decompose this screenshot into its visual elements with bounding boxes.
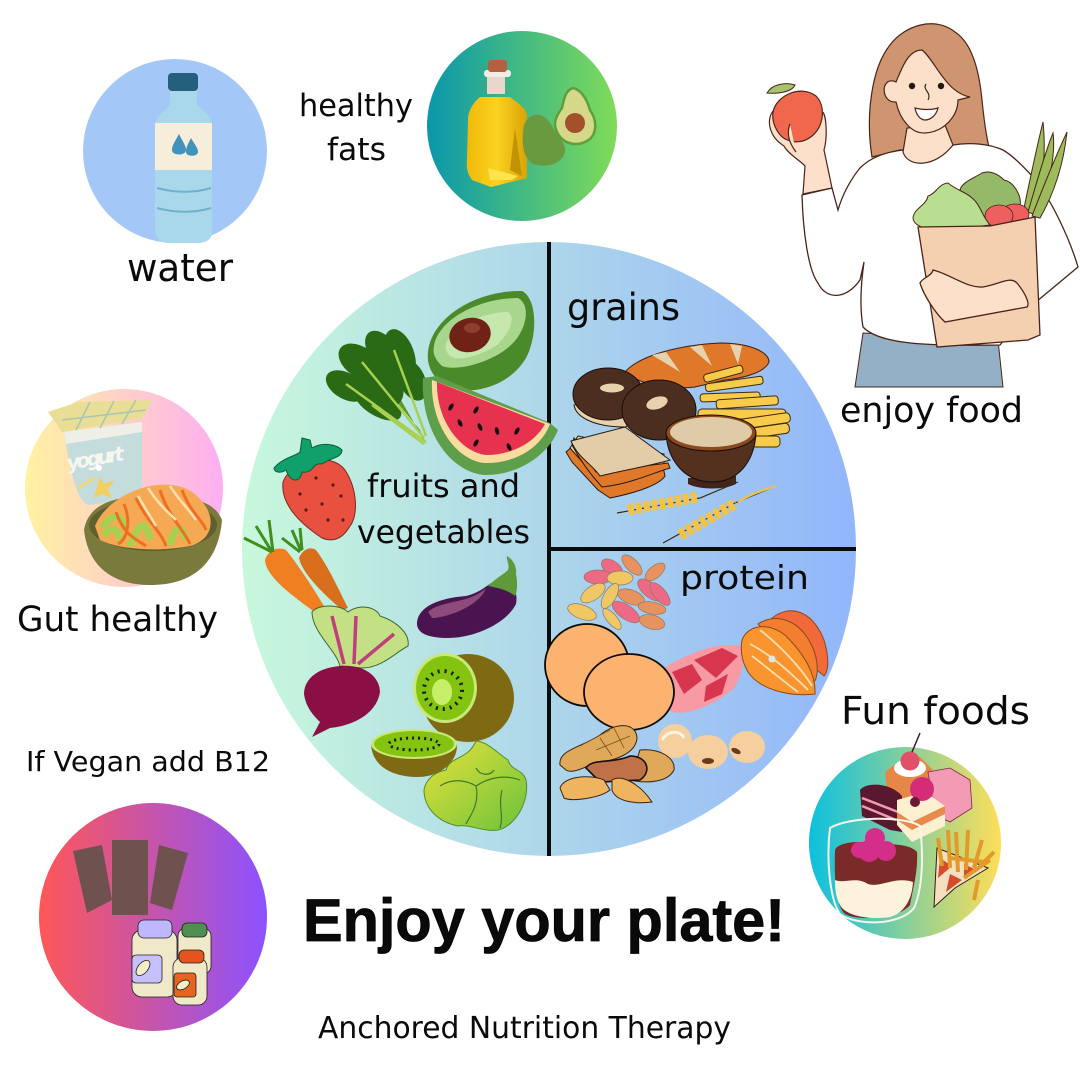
panel: enjoy food woman [767, 24, 1078, 431]
icon: lettuce in bag [913, 183, 990, 232]
text: fruits and vegetables [357, 467, 530, 551]
icon: lettuce [424, 741, 527, 830]
panel: B12 supplements [39, 803, 267, 1031]
icon: leek [1024, 122, 1067, 218]
panel: water [83, 59, 267, 290]
text: grains: grains [567, 286, 680, 329]
text: healthy fats label [299, 88, 413, 168]
text: protein: protein [680, 558, 809, 597]
text: fruits and vegetables: fruits and [367, 467, 520, 505]
icon: spinach [320, 324, 433, 445]
icon: peanuts [560, 726, 674, 803]
grains and protein half [549, 242, 856, 856]
text: vegan note: If Vegan add B12 [26, 745, 270, 778]
panel: gut healthy [17, 389, 223, 640]
icon: eggplant [417, 556, 517, 638]
icon: supplement packets [73, 840, 188, 915]
icon: beet [304, 606, 408, 737]
panel: healthy fats [299, 31, 617, 221]
text: healthy fats label: healthy [299, 88, 413, 124]
icon: avocado [428, 291, 534, 390]
gut healthy circle [25, 389, 223, 587]
icon: soybeans [658, 724, 765, 769]
title: Enjoy your plate! [303, 887, 785, 954]
jeans [855, 333, 1003, 387]
icon: apple in hand [767, 84, 832, 194]
icon: beans [566, 552, 674, 632]
text: brand credit: Anchored Nutrition Therapy [318, 1011, 731, 1046]
panel: fun foods [809, 689, 1030, 939]
icon: steak [663, 645, 743, 713]
icon: broccoli [960, 172, 1020, 222]
forearm and hand on bag [920, 270, 1028, 322]
icon: dessert glass [828, 819, 922, 922]
icon: kiwi halves [371, 653, 514, 777]
smile [915, 108, 938, 120]
icon: kimchi bowl [84, 485, 222, 585]
icon: salmon [741, 611, 828, 695]
text: healthy fats label: fats [327, 132, 386, 168]
icon: petit fours [860, 733, 972, 842]
icon: grocery bag [918, 217, 1040, 347]
panel: plate [242, 242, 856, 856]
icon: eggs [545, 624, 674, 730]
fun foods circle [809, 747, 1001, 939]
icon: yogurt cup: yogurt [65, 441, 127, 475]
healthy fats circle [427, 31, 617, 221]
icon: strawberry [274, 438, 355, 540]
fruits and vegetables half [242, 242, 549, 856]
text: gut healthy label: Gut healthy [17, 600, 218, 640]
sweater [802, 144, 1078, 345]
icon: tomatoes [985, 204, 1029, 227]
icon: avocado pieces [523, 88, 595, 166]
hair [869, 24, 989, 157]
icon: wheat stalks [617, 482, 776, 543]
icon: pasta [698, 365, 791, 447]
icon: sandwich bread [566, 427, 670, 498]
icon: carrots [244, 520, 348, 613]
icon: oil bottle [467, 60, 527, 187]
nose [925, 84, 929, 100]
text: fruits and vegetables: vegetables [357, 513, 530, 551]
icon: oatmeal bowl [666, 415, 756, 488]
supplements circle [39, 803, 267, 1031]
text: water label: water [127, 246, 233, 290]
eyes [909, 83, 944, 89]
icon: baguette [625, 343, 769, 388]
text: enjoy food label: enjoy food [840, 391, 1023, 431]
icon: watermelon slice [423, 376, 558, 475]
text: fun foods label: Fun foods [841, 689, 1030, 733]
water circle [83, 59, 267, 243]
neck [903, 125, 953, 163]
icon: fries [934, 830, 994, 907]
icon: bagels [573, 368, 696, 440]
face [884, 50, 970, 133]
icon: supplement bottles [132, 920, 211, 1005]
icon: water bottle [155, 73, 212, 243]
icon: yogurt cup [48, 400, 152, 505]
